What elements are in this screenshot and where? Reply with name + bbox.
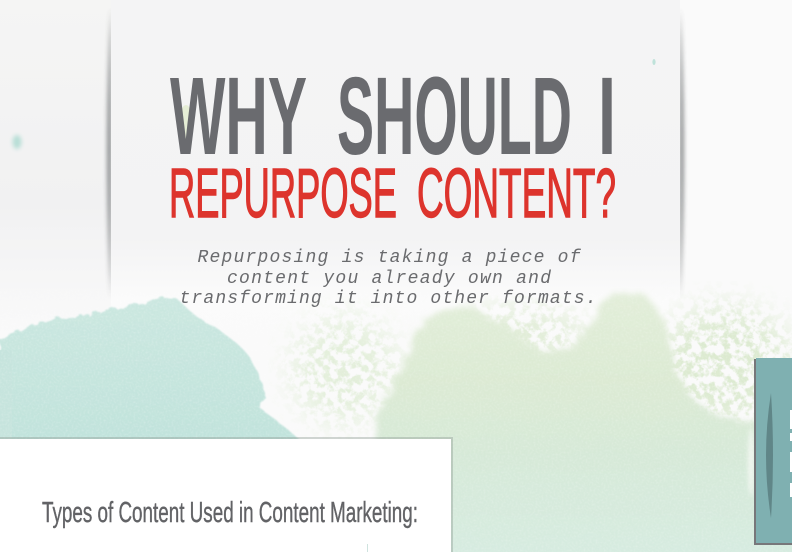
title line 2: CONTENT? — [417, 154, 616, 232]
clipped white lettering — [790, 410, 792, 497]
left background tone — [0, 0, 111, 340]
subtitle: transforming it into other formats. — [180, 289, 596, 309]
watercolor wash: green base — [440, 480, 792, 552]
panel: teal side card — [754, 358, 792, 545]
watercolor wash: teal — [0, 298, 305, 460]
title line 1: WHY — [170, 55, 307, 178]
watercolor wash: teal left edge fill — [0, 350, 12, 450]
subtitle — [180, 248, 596, 309]
title line 1: SHOULD — [337, 55, 572, 178]
subtitle: content you already own and — [227, 269, 551, 289]
watercolor speck: behind title — [179, 105, 193, 145]
panel: title card shadows — [108, 8, 684, 298]
chart axis tick — [367, 544, 368, 552]
subtitle: Repurposing is taking a piece of — [198, 248, 582, 268]
watercolor wash: speckle, centre — [450, 307, 590, 363]
title line 1: I — [598, 55, 616, 178]
watercolor wash: green — [375, 292, 792, 552]
title line 1 — [170, 55, 616, 178]
panel: title card — [111, 0, 680, 340]
title line 2: REPURPOSE — [169, 154, 397, 232]
card inner shadow — [766, 393, 773, 518]
watercolor wash: speckle, right — [655, 305, 792, 425]
watercolor wash: faint speckle, left — [290, 315, 400, 425]
heading: types of content: Types of Content Used in Content Marketing: — [42, 497, 418, 529]
paper grain — [0, 290, 792, 552]
watercolor speck: left — [12, 135, 22, 149]
watercolor light halo by side card — [748, 428, 754, 496]
watercolor speck: top right — [652, 59, 656, 65]
panel: content types card — [0, 437, 453, 552]
title — [169, 55, 616, 232]
